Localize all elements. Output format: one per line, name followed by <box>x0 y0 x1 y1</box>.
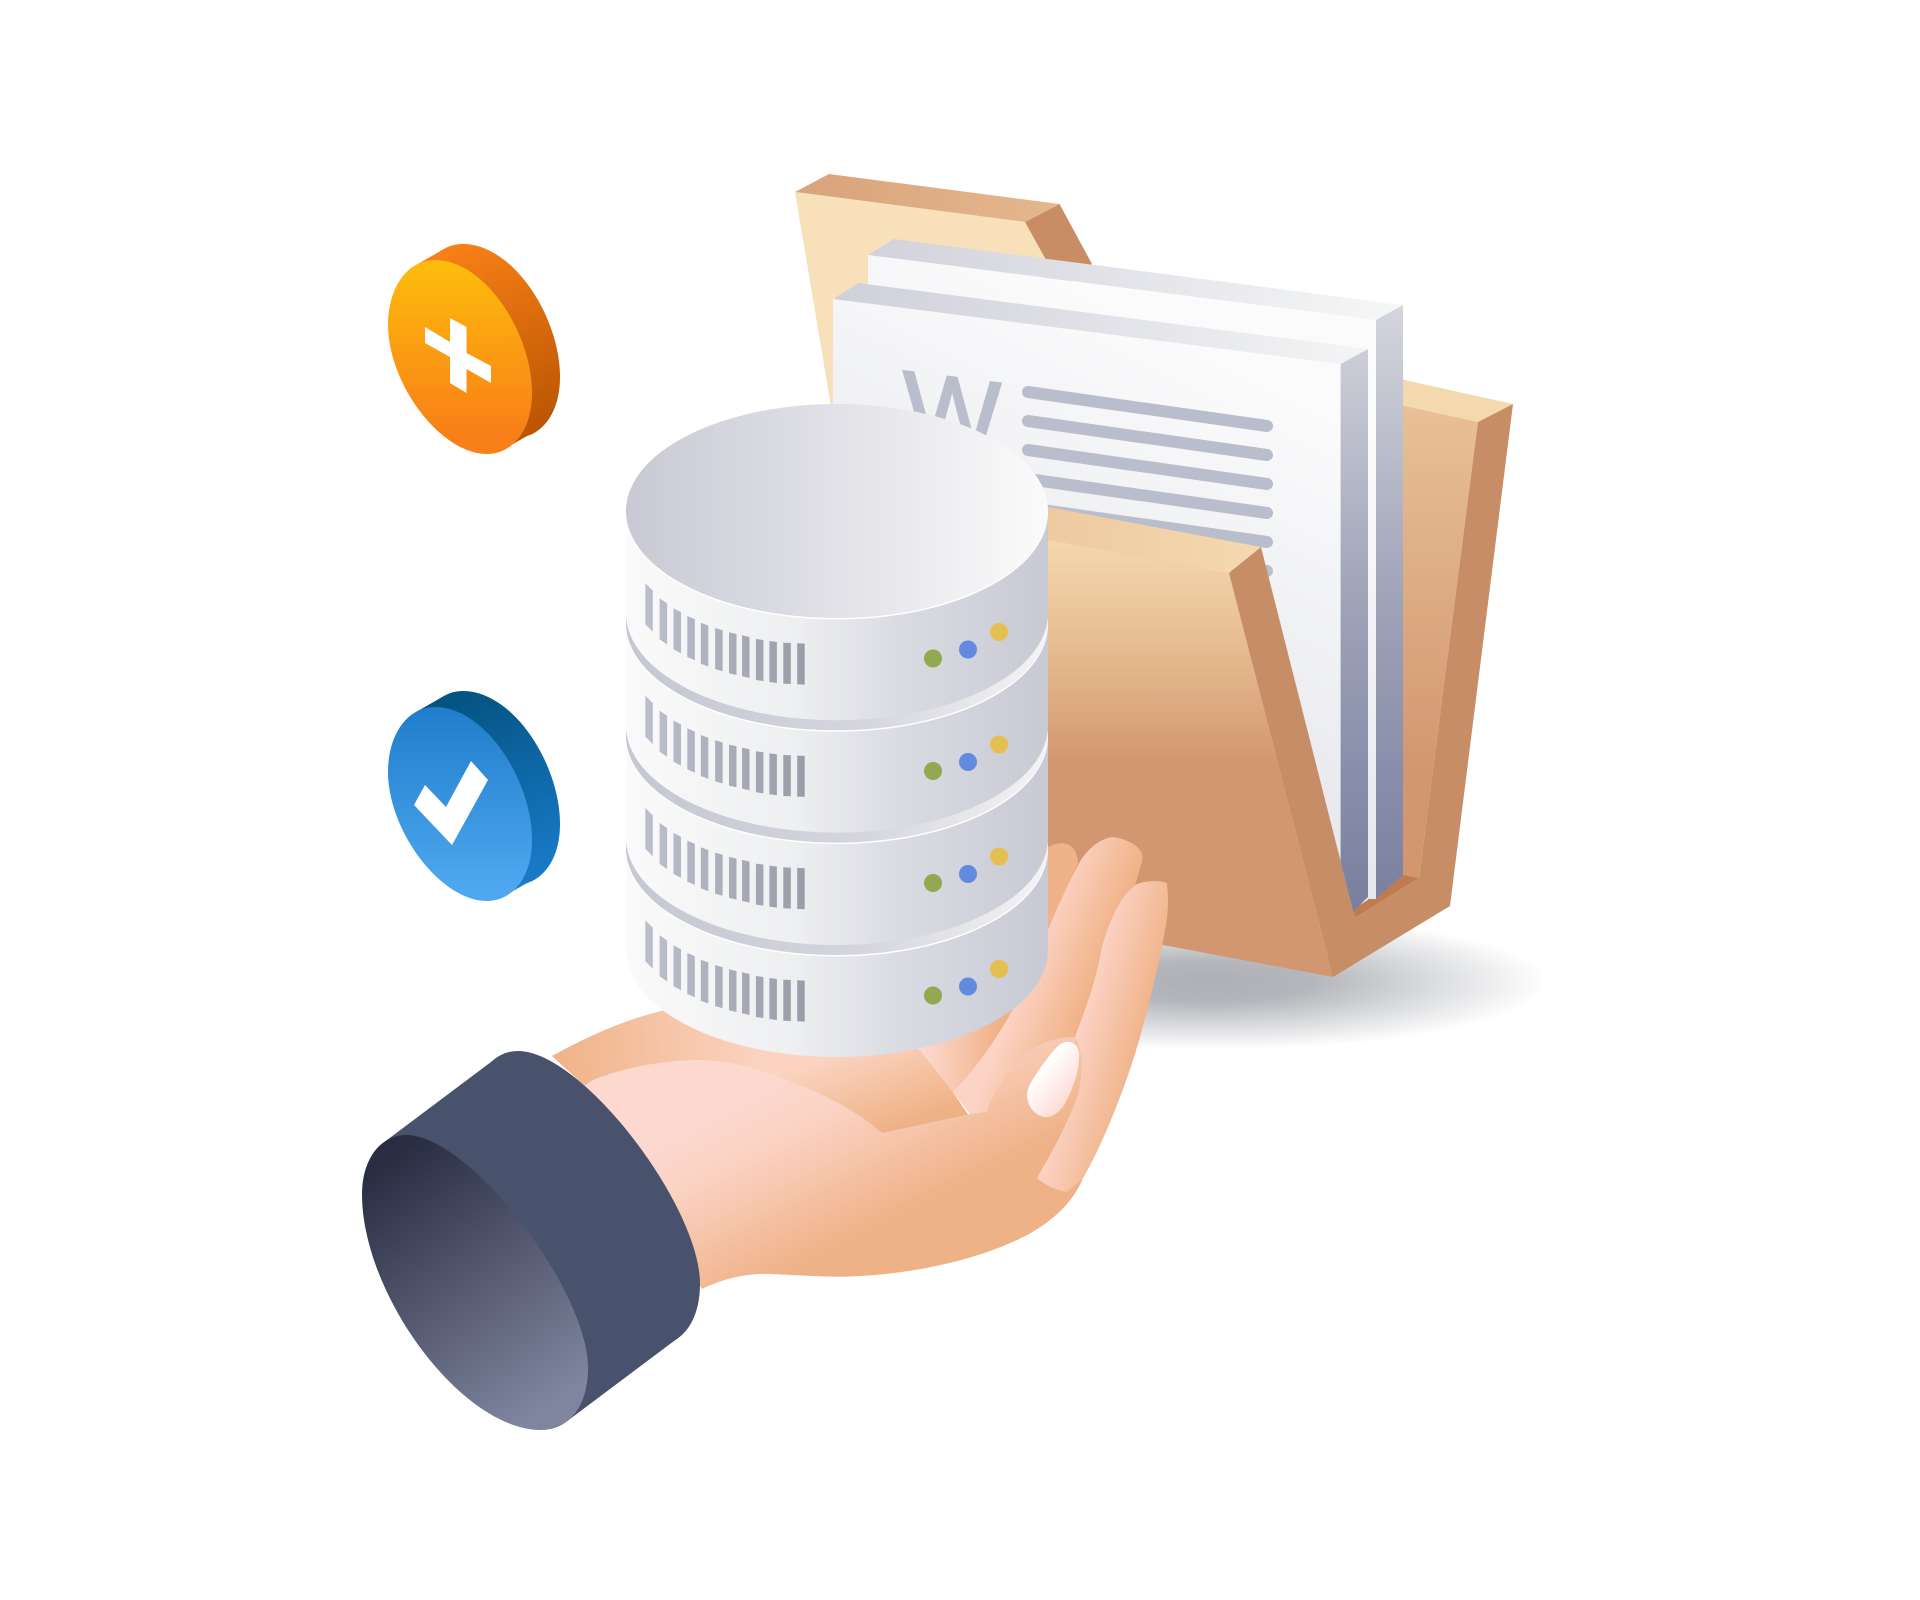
folder <box>795 174 1513 977</box>
back sheet of paper <box>868 239 1403 900</box>
server status lights <box>924 623 1008 1004</box>
document letter W: W <box>903 349 1002 478</box>
folder back panel <box>795 174 1092 520</box>
icon: blue check disk <box>388 691 560 901</box>
hand <box>552 837 1168 1289</box>
palm <box>570 1037 1100 1289</box>
inner palm <box>552 900 1048 1150</box>
thumb nail <box>1027 1042 1079 1117</box>
shirt cuff <box>362 1051 700 1430</box>
outer finger <box>1037 881 1168 1192</box>
server tier 3 <box>626 629 1048 945</box>
folder right panel <box>1353 379 1513 918</box>
index finger <box>953 837 1143 1130</box>
front sheet of paper <box>833 283 1368 930</box>
ground shadow <box>872 914 1548 1050</box>
server tier 2 <box>626 516 1048 833</box>
middle finger <box>1000 843 1078 1000</box>
folder front flap <box>1000 404 1513 977</box>
icon: orange plus disk <box>388 244 560 454</box>
document text lines <box>1028 392 1267 571</box>
server tier 4 <box>626 741 1048 1057</box>
server database stack <box>626 404 1048 1057</box>
server vent bars <box>645 583 805 1022</box>
server tier 1 <box>626 404 1048 720</box>
